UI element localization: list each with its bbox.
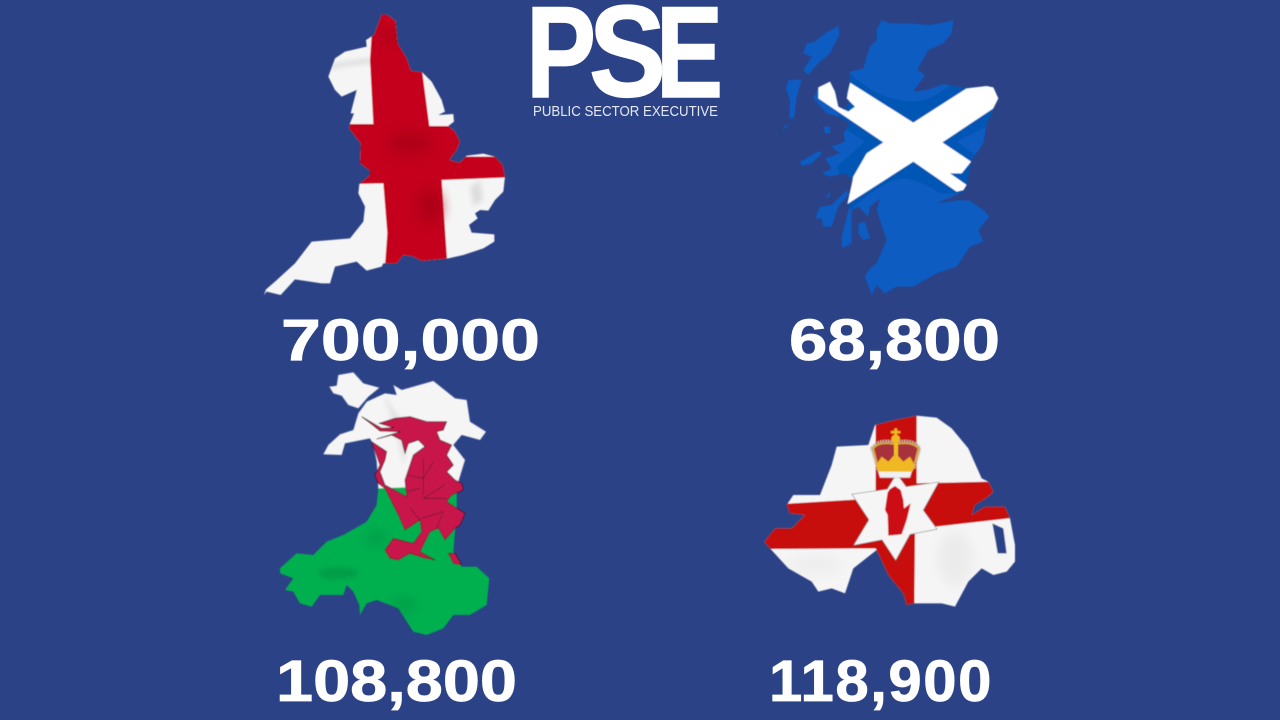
map: Scotland flag [782,20,999,295]
Scottish islands [782,26,870,240]
red hand [885,486,911,536]
Scottish mainland [813,20,994,295]
number: Wales 108,800: 108,800 [276,649,517,714]
logo subtitle: PUBLIC SECTOR EXECUTIVE [533,104,718,120]
map: Wales flag [280,372,490,636]
map: Northern Ireland flag [764,414,1016,608]
crown [872,428,920,478]
infographic canvas [264,4,1016,710]
number: Scotland 68,800: 68,800 [789,308,1000,373]
red dragon [362,417,465,565]
six-pointed star [852,474,938,560]
inlet: Strangford Lough [992,523,1007,553]
St Andrew's saltire [818,82,998,204]
logo: PSE Public Sector Executive [526,0,723,125]
number: England 700,000: 700,000 [281,308,540,373]
number: Northern Ireland 118,900: 118,900 [769,649,993,714]
map: England flag [264,14,506,296]
